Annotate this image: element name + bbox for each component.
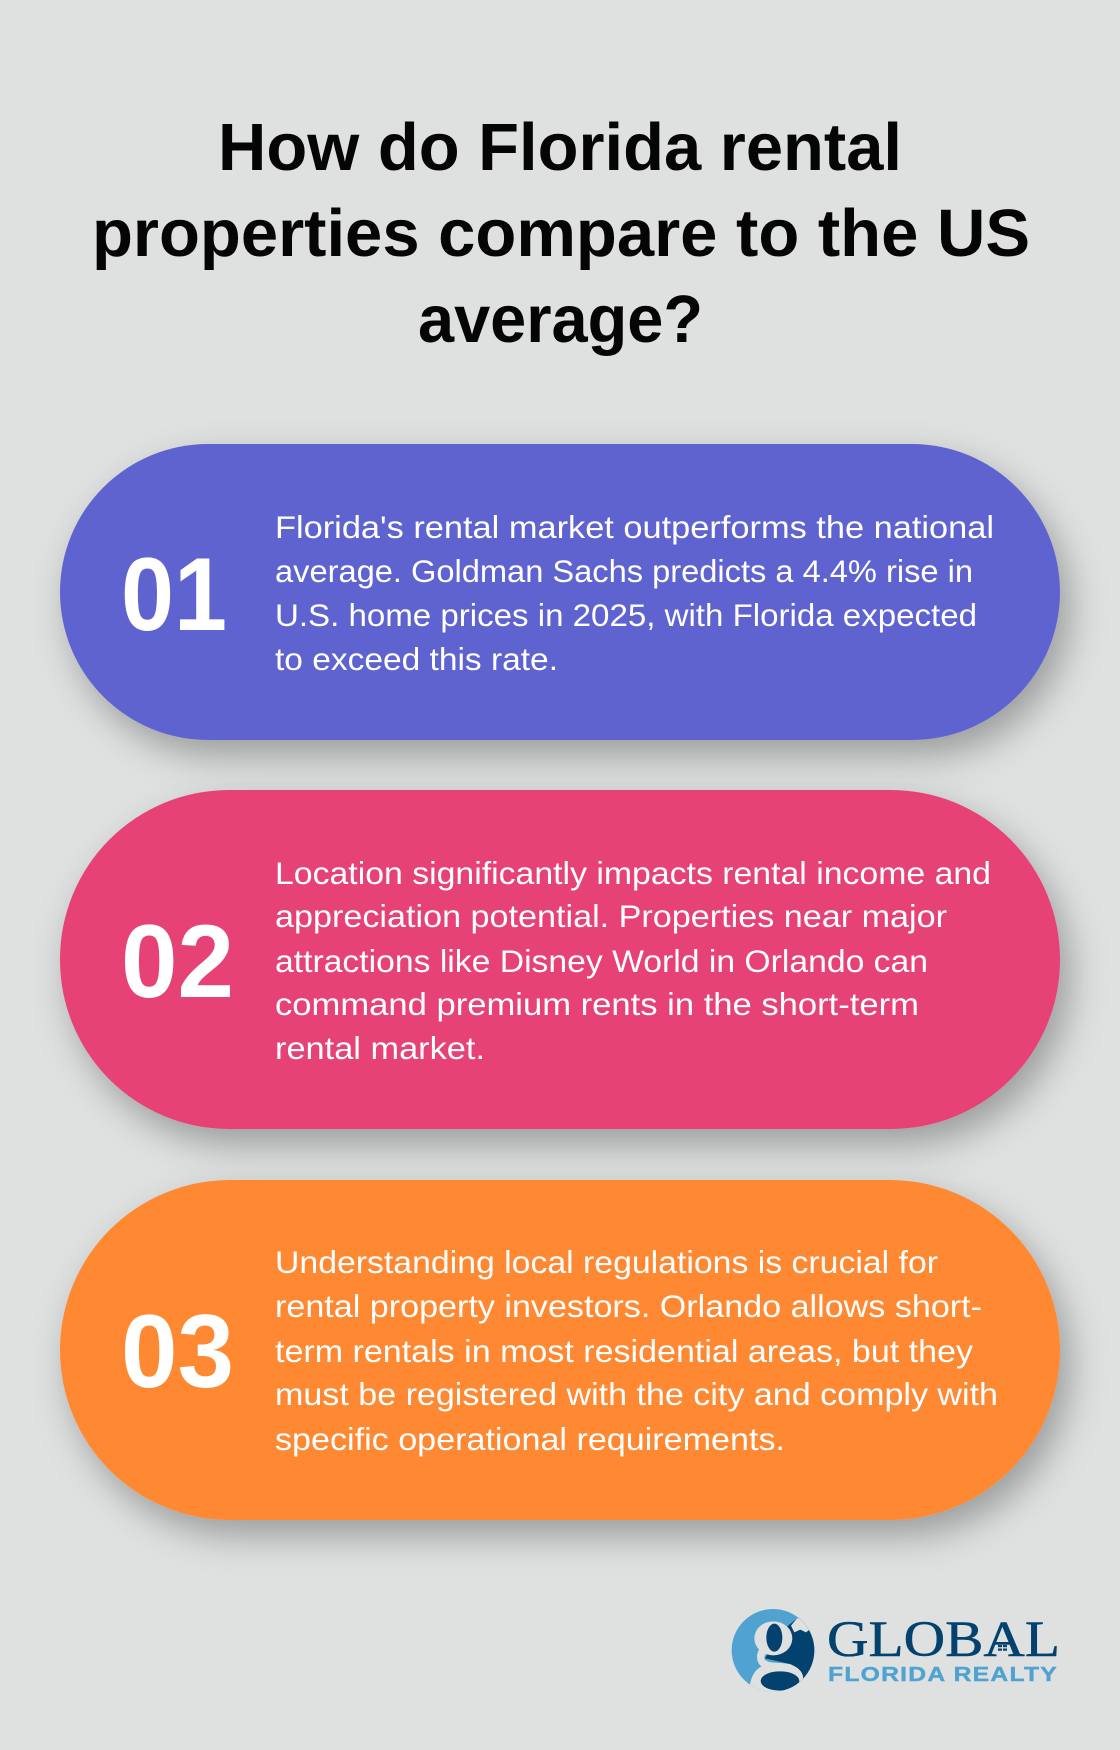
title [92,110,1030,357]
text block: step 01: Florida's rental market outperforms the national [275,509,994,545]
title: properties compare to the US [92,196,1030,271]
number 02: 02 [121,904,234,1020]
number 01: 01 [121,537,227,653]
number 03: 03 [121,1294,234,1410]
icon: house window [998,1645,1007,1651]
text block: step 03: term rentals in most residential areas, but they [275,1333,973,1369]
panel: step 01 [60,444,1060,740]
text block: step 02: appreciation potential. Properties near major [275,898,947,934]
panel: step 03 [60,1180,1060,1520]
title: average? [418,282,703,357]
text block: step 02: command premium rents in the short-term [275,986,919,1022]
text block: step 02: attractions like Disney World in Orlando can [275,943,928,979]
text block: step 01: average. Goldman Sachs predicts a 4.4% rise in [275,553,973,589]
text block: step 03 [275,1244,998,1457]
text block: step 01: U.S. home prices in 2025, with Florida expected [275,597,977,633]
wordmark: GLOBAL: GLOBAL [827,1612,1060,1668]
text block: step 01: to exceed this rate. [275,641,558,677]
text block: step 03: must be registered with the city and comply with [275,1376,998,1412]
logo: Global Florida Realty [732,1609,1057,1692]
text block: step 02: rental market. [275,1030,485,1066]
wordmark: FLORIDA REALTY: FLORIDA REALTY [828,1664,1058,1686]
text block: step 03: specific operational requirements. [275,1421,785,1457]
panel: step 02 [60,790,1060,1129]
title: How do Florida rental [218,110,902,185]
icon: g monogram [732,1609,814,1692]
text block: step 02: Location significantly impacts rental income and [275,855,991,891]
text block: step 03: rental property investors. Orlando allows short- [275,1288,982,1324]
text block: step 03: Understanding local regulations is crucial for [275,1244,938,1280]
text block: step 01 [275,509,994,677]
text block: step 02 [275,855,991,1066]
